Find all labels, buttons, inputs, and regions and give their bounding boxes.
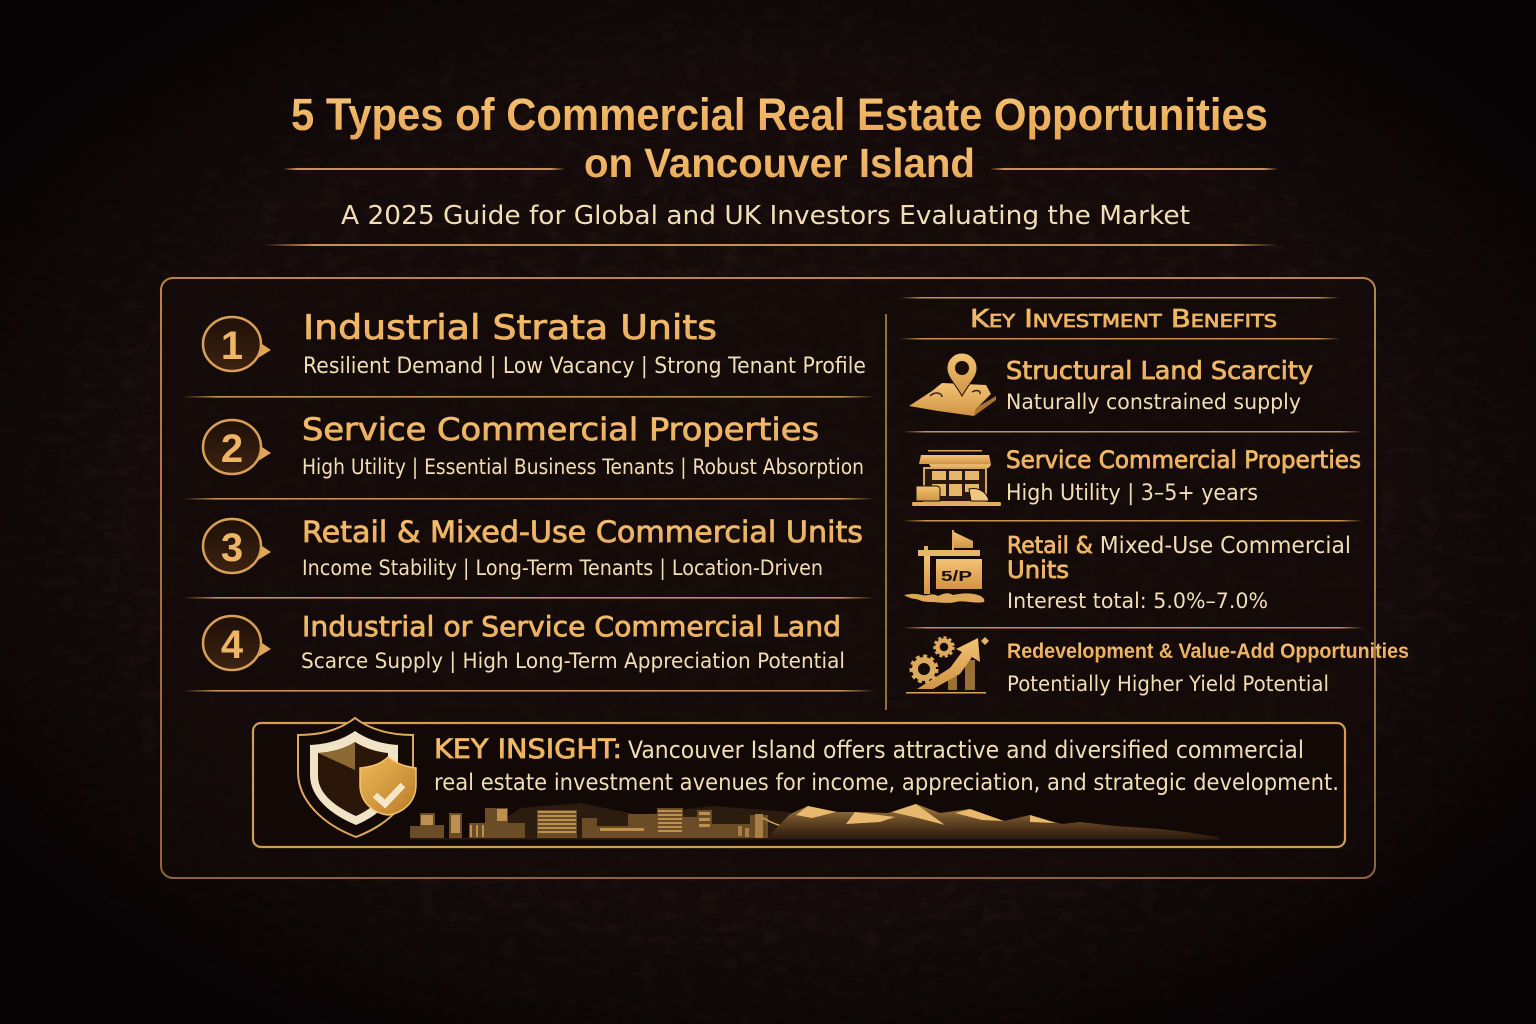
insight text: real estate investment avenues for income, appreciation, and strategic development.: [434, 770, 1339, 796]
benefit: Service Commercial Properties: High Utility | 3–5+ years: [1006, 481, 1258, 506]
insight text: KEY INSIGHT:: [434, 734, 622, 765]
benefit: Redevelopment & Value-Add Opportunities: Redevelopment & Value-Add Opportunities: [1007, 640, 1409, 663]
icon: storefront: [912, 450, 1001, 506]
opportunity 2: Service Commercial Properties: [203, 412, 864, 480]
opportunity 1: Industrial Strata Units: Resilient Demand | Low Vacancy | Strong Tenant Profile: [303, 354, 866, 379]
benefit: Structural Land Scarcity: Naturally constrained supply: [1006, 390, 1301, 414]
benefit: Retail & Mixed-Use Commercial Units: [904, 530, 1351, 613]
icon: map pin on land: [909, 353, 996, 416]
opportunity 1: Industrial Strata Units: Industrial Strata Units: [303, 308, 717, 348]
benefit: Retail & Mixed-Use Commercial Units: Retail & Mixed-Use Commercial: [1007, 533, 1351, 559]
opportunity 3: Retail & Mixed-Use: [203, 515, 863, 581]
benefit: Service Commercial Properties: Service Commercial Properties: [1006, 446, 1361, 474]
callout: key insight: [253, 718, 1345, 847]
panel: opportunity list: [183, 308, 875, 692]
icon: retail sign: 5/P: [941, 568, 972, 585]
benefit: Retail & Mixed-Use Commercial Units: Units: [1007, 556, 1069, 584]
opportunity 4: Industrial or Service Commercial Land: Industrial or Service Commercial Land: [302, 610, 841, 643]
opportunity 3: Retail & Mixed-Use: Income Stability | Long-Term Tenants | Location-Driven: [302, 556, 823, 581]
title: on Vancouver Island: [584, 140, 975, 186]
icon: gears and growth arrow: [906, 637, 989, 694]
opportunity 2: Service Commercial Properties: High Utility | Essential Business Tenants | Robust Absorption: [302, 455, 864, 480]
benefits heading: Key Investment Benefits: [970, 304, 1277, 333]
panel: main content: [161, 278, 1409, 878]
benefit: Service Commercial Properties: [912, 446, 1361, 506]
opportunity 4: Industrial or Service Commercial Land: Scarce Supply | High Long-Term Appreciation Potential: [301, 649, 845, 674]
insight text: [434, 734, 1339, 796]
opportunity 4: Industrial or Service Commercial Land: [203, 610, 845, 674]
subtitle: A 2025 Guide for Global and UK Investors Evaluating the Market: [341, 201, 1190, 231]
benefit: Structural Land Scarcity: Structural Land Scarcity: [1006, 356, 1313, 385]
opportunity 4: Industrial or Service Commercial Land: 4: [221, 623, 244, 667]
benefit: Redevelopment & Value-Add Opportunities: Potentially Higher Yield Potential: [1007, 672, 1329, 696]
opportunity 2: Service Commercial Properties: 2: [221, 427, 243, 471]
opportunity 2: Service Commercial Properties: Service Commercial Properties: [302, 412, 819, 448]
icon: retail sign: [904, 530, 984, 603]
icon: shield with check: [298, 718, 416, 837]
panel: key investment benefits: [900, 297, 1409, 696]
opportunity 1: Industrial Strata Units: [203, 308, 866, 379]
title: 5 Types of Commercial Real Estate Opportunities: [291, 89, 1268, 140]
opportunity 3: Retail & Mixed-Use: 3: [221, 526, 243, 570]
benefit: Structural Land Scarcity: [909, 353, 1313, 416]
opportunity 1: Industrial Strata Units: 1: [221, 324, 243, 368]
benefit: Redevelopment & Value-Add Opportunities: [906, 637, 1409, 696]
opportunity 3: Retail & Mixed-Use: Retail & Mixed-Use Commercial Units: [302, 515, 863, 549]
insight text: Vancouver Island offers attractive and diversified commercial: [628, 736, 1304, 764]
skyline and mountains: [410, 803, 1220, 840]
title: [283, 89, 1278, 186]
benefit: Retail & Mixed-Use Commercial Units: Interest total: 5.0%–7.0%: [1007, 589, 1268, 613]
